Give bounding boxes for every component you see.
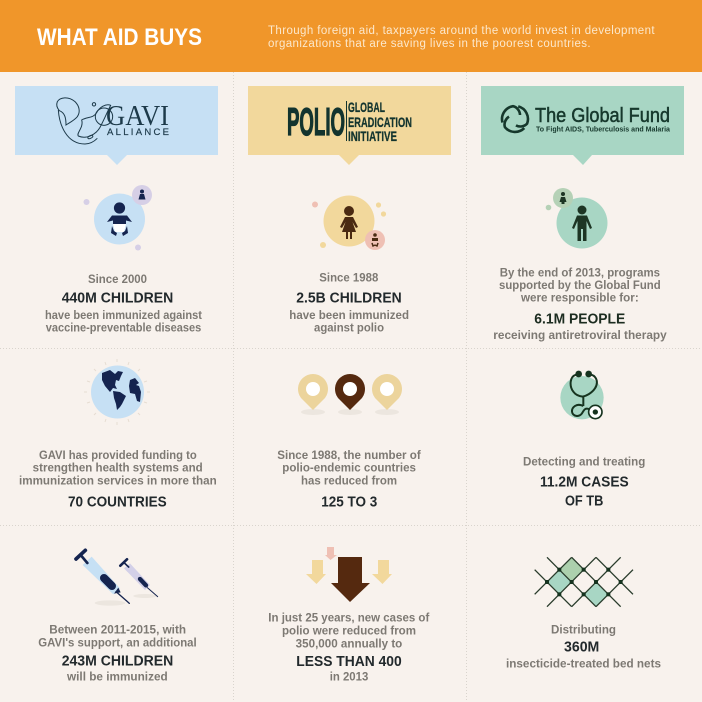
stat: polio-endemic countries: 125 TO 3 (321, 495, 377, 511)
stat: antiretroviral therapy (493, 267, 667, 342)
stat: GAVI countries: GAVI has provided funding to (39, 450, 197, 462)
panel: Global Fund logo banner: To Fight AIDS, Tuberculosis and Malaria (536, 124, 671, 134)
stat: GAVI additional children: GAVI's support, an additional (38, 638, 197, 650)
stat: bed nets (506, 624, 661, 670)
intro text (268, 25, 655, 50)
stat: GAVI children: have been immunized against (45, 310, 202, 322)
stat: polio-endemic countries (277, 450, 421, 511)
icon: syringes (76, 550, 158, 606)
panel: GAVI logo banner: ALLIANCE (107, 127, 169, 138)
icon: bed net (535, 557, 633, 607)
panel: Global Fund logo banner (481, 86, 684, 165)
panel: GAVI logo banner (15, 86, 218, 165)
stat: polio cases: LESS THAN 400 (296, 654, 402, 670)
stat: bed nets: insecticide-treated bed nets (506, 658, 661, 670)
stat: antiretroviral therapy: were responsible for: (520, 293, 639, 305)
stat: GAVI children (45, 274, 202, 335)
stat: polio cases: 350,000 annually to (296, 638, 402, 650)
stat: antiretroviral therapy: receiving antiretroviral therapy (493, 330, 667, 342)
stat: Polio children: against polio (314, 323, 384, 335)
panel: Polio logo banner: INITIATIVE (348, 128, 397, 144)
stat: GAVI children: 440M CHILDREN (62, 291, 173, 307)
stat: GAVI countries: 70 COUNTRIES (68, 495, 167, 511)
stat: bed nets: Distributing (551, 624, 616, 636)
stat: polio cases (268, 612, 429, 684)
stat: GAVI additional children (38, 624, 197, 684)
logo wordmark: GAVI (106, 100, 169, 132)
icon: map pins (298, 374, 402, 415)
stat: antiretroviral therapy: 6.1M PEOPLE (534, 311, 625, 327)
intro text: organizations that are saving lives in the poorest countries. (268, 38, 591, 50)
stat: antiretroviral therapy: supported by the Global Fund (499, 280, 661, 292)
stat: GAVI children: Since 2000 (88, 274, 147, 286)
stat: antiretroviral therapy: By the end of 2013, programs (500, 267, 660, 279)
icon: down arrows (306, 547, 392, 602)
stat: Polio children: Since 1988 (319, 273, 379, 285)
stat: GAVI additional children: will be immunized (66, 672, 168, 684)
stat: polio-endemic countries: Since 1988, the number of (277, 450, 421, 462)
logo swirl (501, 106, 533, 137)
title: WHAT AID BUYS (37, 24, 202, 51)
icon: person (546, 188, 608, 248)
stat: polio-endemic countries: polio-endemic countries (282, 463, 416, 475)
stat: TB cases: 11.2M CASES (540, 474, 629, 490)
stat: Polio children: 2.5B CHILDREN (296, 291, 402, 307)
stat: polio cases: In just 25 years, new cases of (268, 612, 429, 624)
stat: TB cases: Detecting and treating (523, 457, 645, 469)
icon: stethoscope (560, 371, 604, 419)
stat: TB cases (523, 457, 645, 510)
intro text: Through foreign aid, taxpayers around the world invest in development (268, 25, 655, 37)
stat: polio cases: polio were reduced from (282, 626, 416, 638)
panel: Polio logo banner: POLIO (287, 101, 345, 144)
stat: GAVI countries: immunization services in more than (19, 475, 217, 487)
logo wordmark: The Global Fund (535, 105, 670, 127)
stat: bed nets: 360M (564, 640, 599, 656)
stat: polio cases: in 2013 (330, 672, 368, 684)
panel: Polio logo banner: ERADICATION (348, 114, 412, 130)
icon: baby (84, 185, 152, 250)
stat: Polio children: have been immunized (289, 310, 409, 322)
stat: GAVI additional children: Between 2011-2015, with (49, 624, 186, 636)
stat: GAVI countries (19, 450, 217, 511)
stat: TB cases: OF TB (565, 494, 603, 510)
stat: GAVI additional children: 243M CHILDREN (62, 654, 173, 670)
panel: Polio logo banner: GLOBAL (348, 99, 385, 115)
panel: Polio logo banner (248, 86, 451, 165)
stat: GAVI children: vaccine-preventable diseases (46, 323, 201, 335)
stat: polio-endemic countries: has reduced from (301, 475, 397, 487)
header band (0, 0, 702, 72)
stat: Polio children (289, 273, 409, 335)
icon: globe (84, 359, 150, 425)
stat: GAVI countries: strengthen health systems and (33, 463, 203, 475)
logo globe outline (57, 98, 113, 144)
icon: girl (312, 196, 386, 250)
